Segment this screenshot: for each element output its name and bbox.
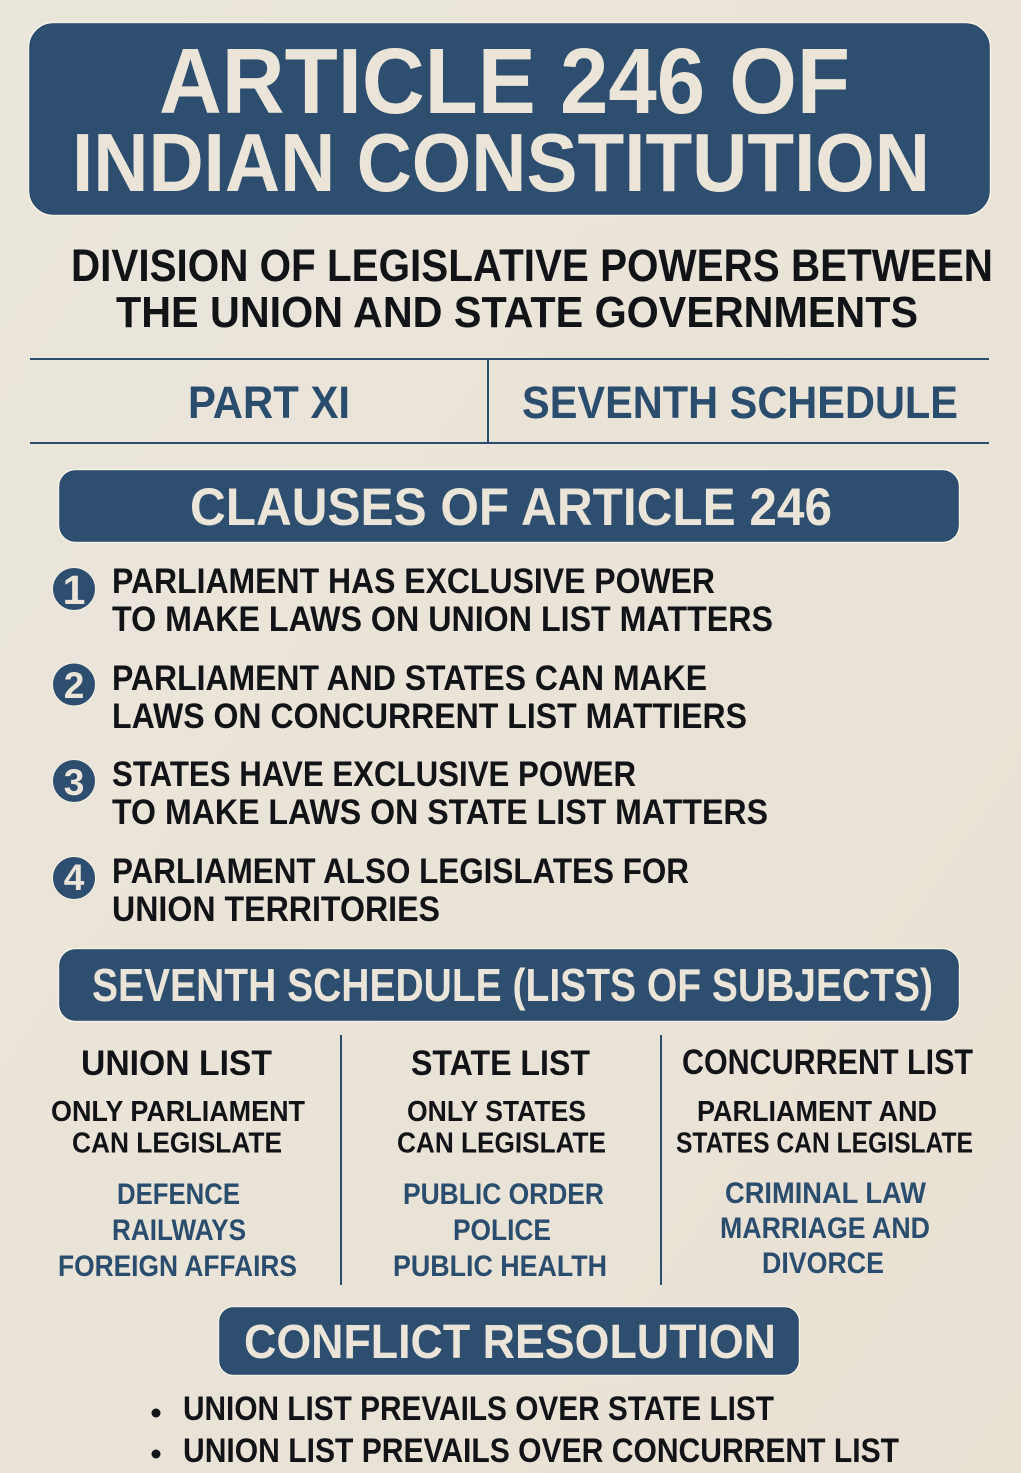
panel: state list bbox=[393, 1044, 607, 1283]
clause 3: STATES HAVE EXCLUSIVE POWER bbox=[112, 755, 636, 794]
conflict rules list bbox=[152, 1390, 899, 1470]
reference strip: part and schedule: PART XI bbox=[188, 377, 350, 428]
panel: concurrent list: MARRIAGE AND bbox=[720, 1212, 930, 1245]
title banner: INDIAN CONSTITUTION bbox=[72, 116, 930, 209]
clause 3: 3 bbox=[64, 762, 84, 803]
clause 4: PARLIAMENT ALSO LEGISLATES FOR bbox=[112, 852, 689, 891]
heading: clauses of article 246: CLAUSES OF ARTICLE 246 bbox=[190, 478, 832, 537]
panel: concurrent list: PARLIAMENT AND bbox=[697, 1096, 937, 1128]
clause 3: TO MAKE LAWS ON STATE LIST MATTERS bbox=[112, 793, 768, 832]
panel: union list: UNION LIST bbox=[81, 1044, 272, 1083]
clause 1 bbox=[52, 562, 773, 639]
panel: concurrent list: STATES CAN LEGISLATE bbox=[676, 1128, 973, 1160]
clause 1: TO MAKE LAWS ON UNION LIST MATTERS bbox=[112, 600, 773, 639]
clause 1: 1 bbox=[63, 567, 85, 613]
title banner bbox=[28, 22, 990, 216]
panel: state list: PUBLIC ORDER bbox=[403, 1178, 604, 1211]
clause 2: 2 bbox=[64, 665, 84, 706]
clause 4: UNION TERRITORIES bbox=[112, 890, 440, 929]
subtitle: THE UNION AND STATE GOVERNMENTS bbox=[116, 288, 918, 337]
clause 2: PARLIAMENT AND STATES CAN MAKE bbox=[112, 659, 707, 698]
clause 3 bbox=[52, 755, 768, 832]
clause 2: LAWS ON CONCURRENT LIST MATTIERS bbox=[112, 697, 747, 736]
panel: state list: CAN LEGISLATE bbox=[397, 1128, 606, 1160]
heading: clauses of article 246 bbox=[58, 470, 960, 542]
clause 2 bbox=[52, 659, 747, 736]
panel: concurrent list: DIVORCE bbox=[762, 1247, 884, 1280]
panel: concurrent list: CONCURRENT LIST bbox=[682, 1043, 973, 1082]
subtitle bbox=[71, 240, 993, 337]
conflict rules list: UNION LIST PREVAILS OVER CONCURRENT LIST bbox=[183, 1432, 899, 1470]
panel: concurrent list: CRIMINAL LAW bbox=[725, 1177, 927, 1210]
clause list bbox=[52, 562, 773, 929]
reference strip: part and schedule: SEVENTH SCHEDULE bbox=[522, 377, 958, 428]
clause 1: PARLIAMENT HAS EXCLUSIVE POWER bbox=[112, 562, 715, 601]
panel: union list: FOREIGN AFFAIRS bbox=[58, 1250, 297, 1283]
clause 4: 4 bbox=[64, 857, 85, 898]
heading: seventh schedule bbox=[58, 948, 960, 1022]
panel: union list: ONLY PARLIAMENT bbox=[51, 1096, 305, 1128]
clause 4 bbox=[52, 852, 689, 929]
panel: state list: POLICE bbox=[453, 1214, 551, 1247]
panel: concurrent list bbox=[676, 1043, 973, 1280]
heading: conflict resolution: CONFLICT RESOLUTION bbox=[244, 1316, 776, 1369]
panel: union list bbox=[51, 1044, 305, 1283]
panel: union list: RAILWAYS bbox=[112, 1214, 246, 1247]
panel: union list: CAN LEGISLATE bbox=[72, 1128, 282, 1160]
panel: union list: DEFENCE bbox=[117, 1178, 240, 1211]
title banner: ARTICLE 246 OF bbox=[159, 29, 850, 133]
reference strip: part and schedule bbox=[30, 359, 989, 443]
panel: state list: ONLY STATES bbox=[407, 1096, 586, 1128]
panel: state list: STATE LIST bbox=[411, 1044, 590, 1083]
panel: state list: PUBLIC HEALTH bbox=[393, 1250, 607, 1283]
conflict rules list: UNION LIST PREVAILS OVER STATE LIST bbox=[183, 1390, 774, 1428]
